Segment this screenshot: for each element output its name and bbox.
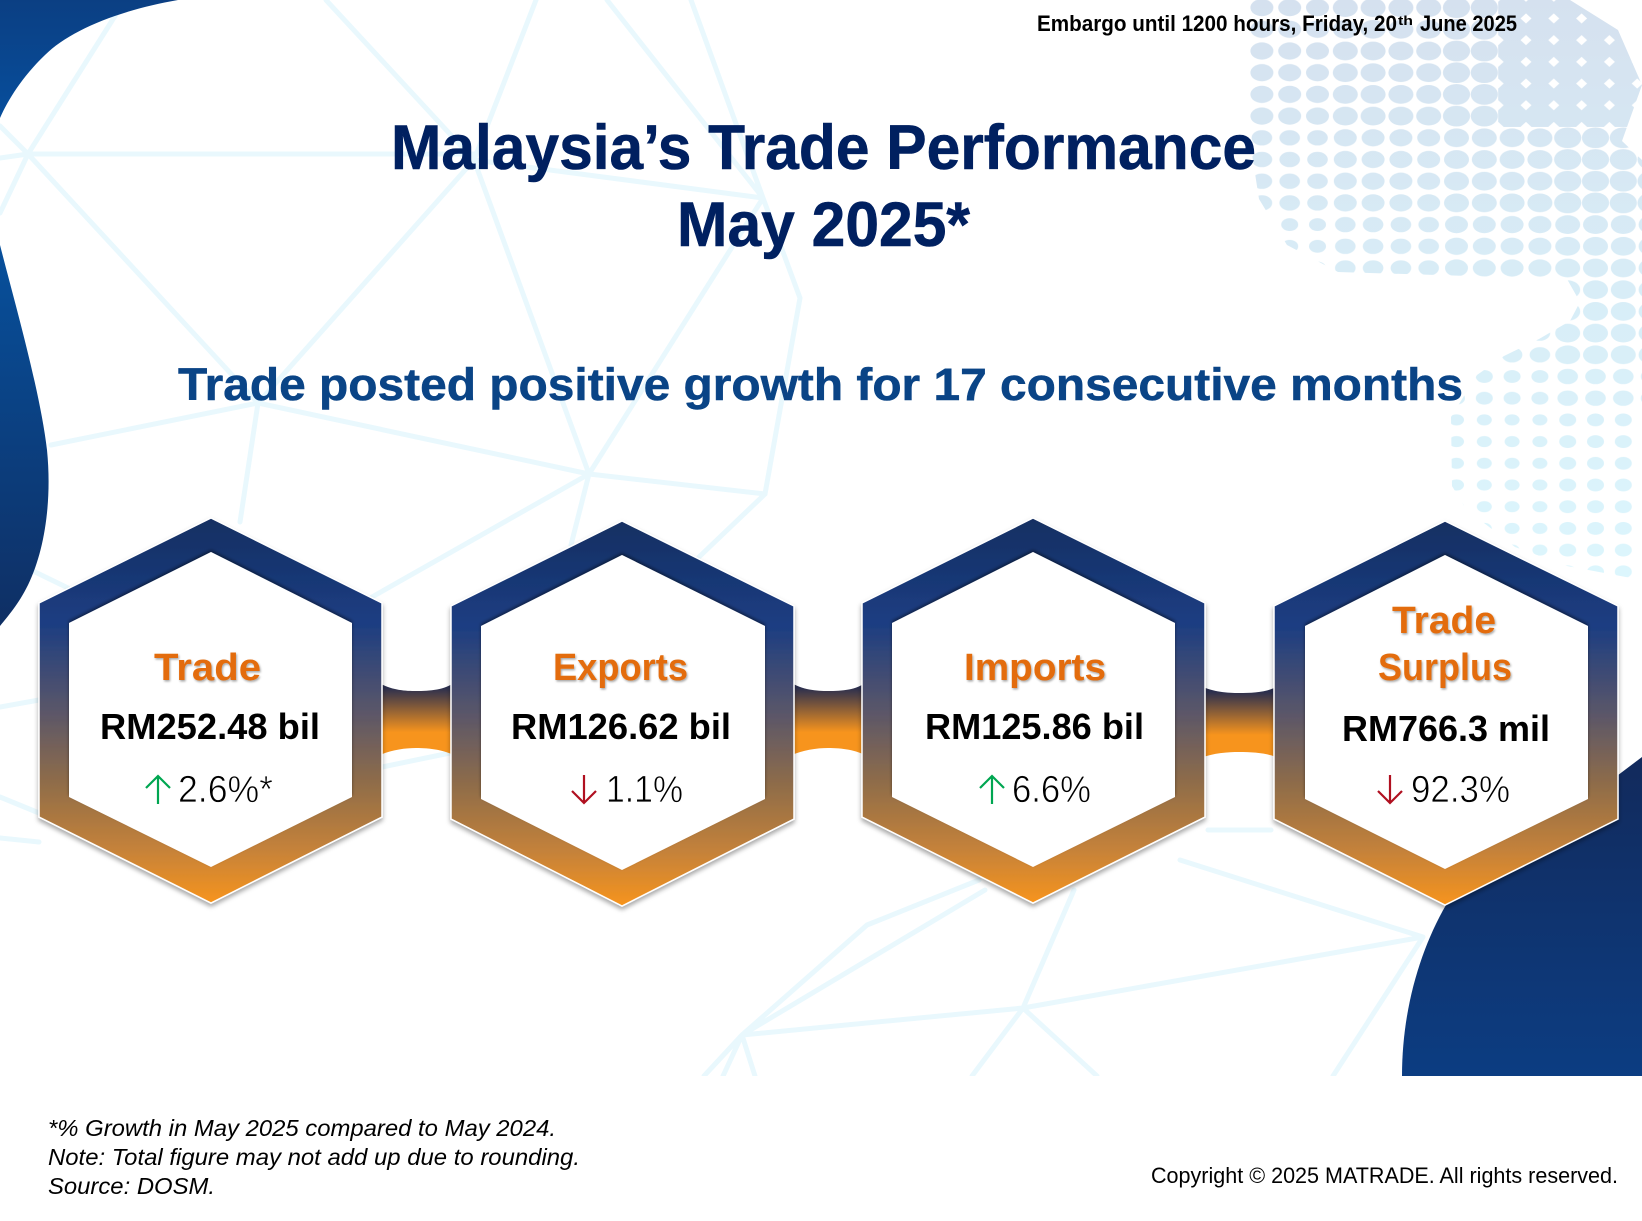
label: Exports: [553, 647, 688, 689]
panel: trade: [39, 518, 382, 903]
embargo notice: Embargo until 1200 hours, Friday, 20: [1037, 11, 1397, 36]
growth: 6.6%: [1012, 769, 1091, 811]
background network lines: [0, 0, 1423, 1076]
growth: 92.3%: [1411, 769, 1510, 811]
embargo notice: June 2025: [1420, 11, 1517, 36]
hexagon frame: [39, 518, 382, 903]
panel: exports: [451, 521, 794, 906]
value: RM252.48 bil: [100, 706, 320, 747]
footnotes: Source: DOSM.: [48, 1173, 215, 1199]
hexagon frame: [862, 518, 1205, 903]
label: Trade: [1392, 600, 1496, 642]
value: RM126.62 bil: [511, 706, 731, 747]
copyright: Copyright © 2025 MATRADE. All rights reserved.: [1151, 1163, 1618, 1188]
halftone dot map shape: [1250, 0, 1642, 578]
embargo notice: th: [1398, 13, 1413, 28]
panel: imports: [862, 518, 1205, 903]
label: Trade: [154, 647, 261, 689]
footnotes: Note: Total figure may not add up due to rounding.: [48, 1144, 580, 1170]
connector 2: [790, 682, 866, 756]
hexagon frame: [451, 521, 794, 906]
up arrow: [980, 776, 1004, 804]
title: May 2025*: [677, 190, 970, 260]
label: Imports: [964, 647, 1106, 689]
growth: 1.1%: [606, 769, 683, 811]
down arrow: [572, 775, 596, 803]
panel: trade surplus: [1274, 521, 1618, 905]
hexagon interior: [1305, 555, 1588, 869]
title: Malaysia’s Trade Performance: [391, 113, 1256, 183]
top-left corner shape: [0, 0, 178, 118]
label: [1378, 600, 1512, 689]
hexagon interior: [892, 552, 1175, 867]
subtitle: Trade posted positive growth for 17 consecutive months: [178, 359, 1463, 410]
footnotes: [48, 1115, 580, 1199]
hexagon interior: [481, 555, 765, 870]
growth: 2.6%*: [178, 769, 273, 811]
title: [391, 113, 1256, 260]
connector 1: [378, 682, 455, 756]
hexagon interior: [69, 552, 352, 867]
up arrow: [146, 776, 170, 804]
value: RM125.86 bil: [925, 706, 1144, 747]
hexagon frame: [1274, 521, 1618, 905]
down arrow: [1378, 775, 1402, 803]
footnotes: *% Growth in May 2025 compared to May 2024.: [48, 1115, 556, 1141]
left edge shape: [0, 245, 49, 626]
value: RM766.3 mil: [1342, 708, 1550, 749]
label: Surplus: [1378, 647, 1512, 689]
bottom-right corner shape: [1402, 757, 1642, 1076]
connector 3: [1201, 686, 1278, 758]
